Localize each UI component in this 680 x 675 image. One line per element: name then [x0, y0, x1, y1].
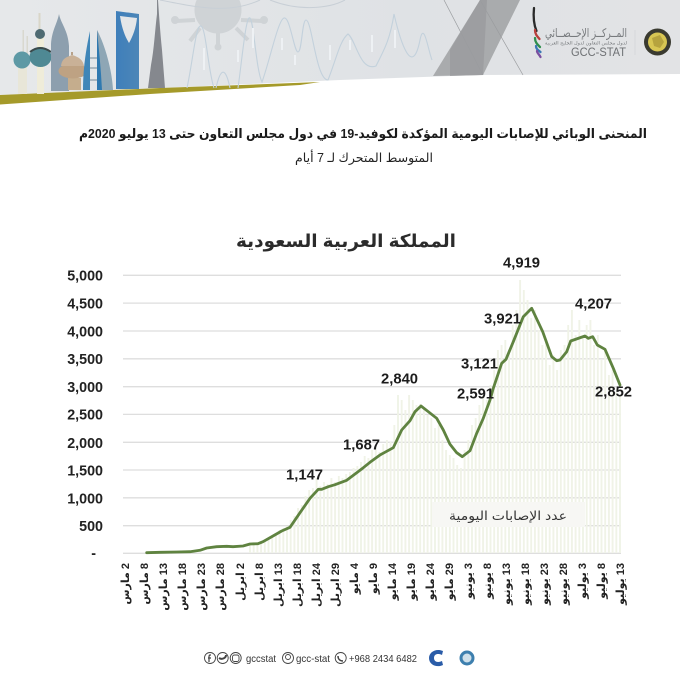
x axis date labels: 9 مايو: [368, 563, 380, 595]
data labels: 2,852: [595, 384, 632, 400]
title line 2: المتوسط المتحرك لـ 7 أيام: [295, 149, 433, 166]
certification logo G: [429, 650, 443, 666]
x axis date labels: 13 مارس: [158, 563, 170, 611]
x axis date labels: 13 ابريل: [273, 563, 285, 607]
faint curves: [187, 14, 432, 88]
legend label: عدد الإصابات اليومية: [449, 509, 567, 524]
x axis date labels: 24 ابريل: [311, 562, 323, 607]
x axis date labels: 8 يوليو: [596, 563, 608, 600]
Burj tower: [148, 0, 165, 88]
logo subtitle: لدول مجلس التعاون لدول الخليج العربية: [545, 40, 627, 46]
y axis labels: 5,000: [67, 268, 103, 284]
gray ribbon: [433, 0, 520, 76]
data labels: 3,921: [484, 312, 521, 328]
logo GCC-STAT: [534, 8, 635, 59]
x axis date labels: 8 يونيو: [482, 563, 494, 600]
twin sails tower: [83, 30, 113, 90]
y axis labels: 4,500: [67, 296, 103, 312]
x axis date labels: 23 يونيو: [539, 563, 551, 606]
Kingdom Centre tower: [116, 11, 139, 89]
x axis date labels: 18 مارس: [177, 563, 189, 611]
x axis date labels: 13 يوليو: [615, 563, 627, 606]
tan round building: [58, 52, 88, 90]
olive swoosh: [0, 82, 320, 104]
y axis labels: 3,500: [67, 352, 103, 368]
x axis date labels: 18 يونيو: [520, 563, 532, 606]
x axis date labels: 2 ابريل: [235, 563, 247, 601]
title line 1: المنحنى الوبائي للإصابات اليومية المؤكدة لكوفيد-19 في دول مجلس التعاون حتى 13 يوليو 2020م: [79, 126, 647, 142]
chart: [67, 256, 632, 611]
handle gcc-stat: gcc-stat: [296, 653, 330, 665]
footer contacts: [204, 650, 474, 666]
y axis labels: 4,000: [67, 324, 103, 340]
y axis labels: 1,500: [67, 464, 103, 480]
logo ribbon: [534, 8, 540, 57]
certification logo TUV: [460, 650, 474, 666]
logo latin name: GCC-STAT: [571, 45, 627, 59]
x axis date labels: 3 يونيو: [463, 563, 475, 600]
x axis date labels: 13 يونيو: [501, 563, 513, 606]
y axis labels: 1,000: [67, 492, 103, 508]
y axis labels: 2,500: [67, 408, 103, 424]
x axis date labels: 4 مايو: [349, 562, 361, 595]
x axis date labels: 19 مايو: [406, 563, 418, 601]
x axis date labels: 2 مارس: [120, 563, 132, 605]
virus watermark: [172, 0, 268, 50]
x axis date labels: 29 مايو: [444, 563, 456, 601]
legend label: [432, 502, 585, 527]
x axis date labels: 14 مايو: [387, 562, 399, 601]
data labels: 2,840: [381, 372, 418, 388]
x axis date labels: [120, 562, 627, 611]
y axis labels: 2,000: [67, 436, 103, 452]
tapered gray tower: [51, 14, 69, 91]
data labels: 2,591: [457, 386, 494, 402]
logo Arabic name: المــركــز الإحــصــائي: [545, 26, 627, 41]
x axis date labels: 8 مارس: [139, 563, 151, 605]
y axis labels: 500: [79, 519, 103, 535]
phone number: +968 2434 6482: [349, 653, 417, 665]
daily cases bars: [250, 280, 620, 553]
x axis date labels: 28 يونيو: [558, 563, 570, 606]
social icons: [204, 652, 346, 664]
x axis date labels: 23 مارس: [196, 563, 208, 611]
Kuwait small tower: [14, 30, 30, 94]
data labels: 1,687: [343, 438, 380, 454]
skyline illustration: [14, 0, 165, 94]
y axis labels: [67, 268, 103, 562]
x axis date labels: 3 يوليو: [577, 563, 589, 600]
data labels: [286, 256, 632, 484]
handle gccstat: gccstat: [246, 653, 276, 665]
header banner: [0, 0, 680, 104]
chart heading: المملكة العربية السعودية: [236, 231, 456, 252]
gridlines: [123, 275, 621, 553]
x axis date labels: 28 مارس: [215, 563, 227, 611]
data labels: 4,919: [503, 256, 540, 272]
data labels: 3,121: [461, 356, 498, 372]
x axis date labels: 24 مايو: [425, 562, 437, 601]
data labels: 1,147: [286, 468, 323, 484]
7-day moving average line: [147, 308, 620, 553]
x axis date labels: 29 ابريل: [330, 563, 342, 607]
GCC emblem: [644, 28, 671, 56]
x axis date labels: 8 ابريل: [254, 563, 266, 601]
x axis date labels: 18 ابريل: [292, 563, 304, 607]
y axis labels: 3,000: [67, 380, 103, 396]
data labels: 4,207: [575, 296, 612, 312]
Kuwait tall tower: [30, 13, 52, 94]
y axis labels: -: [91, 546, 96, 562]
